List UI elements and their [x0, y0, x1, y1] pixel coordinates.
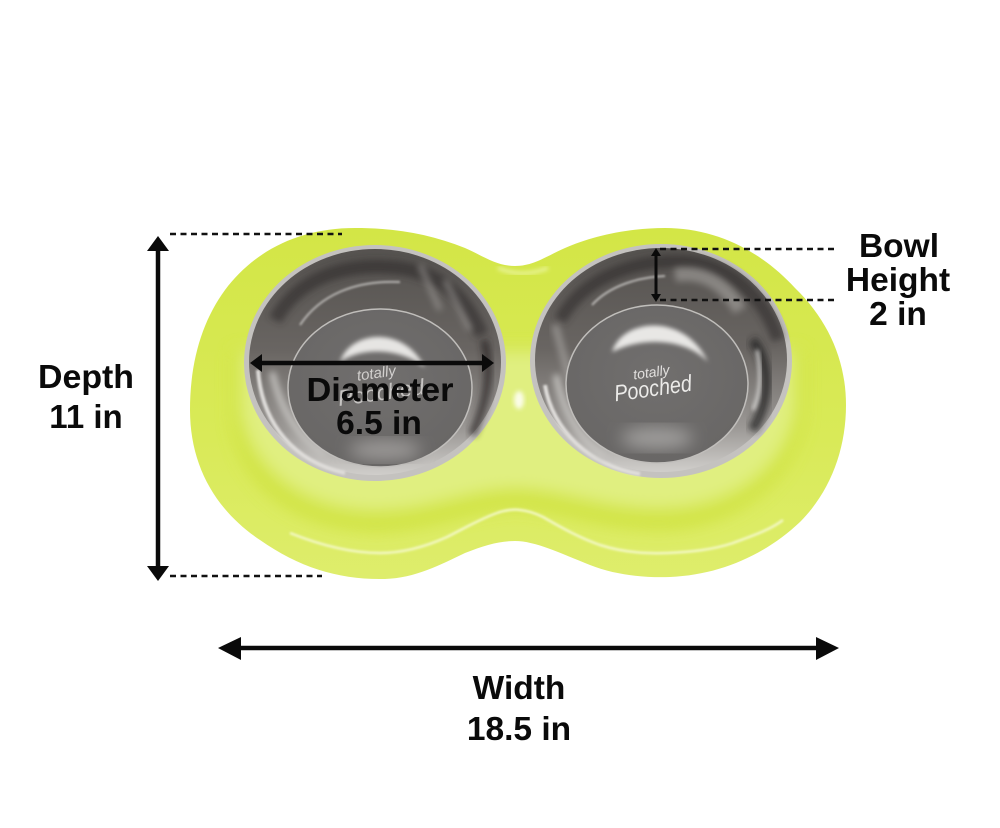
label: width [467, 670, 571, 748]
bowl logo: left: totally [356, 362, 398, 385]
label: bowl height [846, 228, 950, 333]
arrow: width [218, 637, 839, 660]
label: depth: Depth [38, 358, 134, 395]
bowl logo: right: totally [632, 361, 672, 383]
product photo: double bowl feeder [190, 228, 846, 579]
arrow: bowl height [651, 248, 661, 302]
depth guide lines [170, 234, 342, 576]
label: diameter: Diameter [306, 371, 454, 408]
label: bowl height: Bowl [859, 228, 939, 265]
label: diameter [306, 371, 454, 442]
green tray [190, 228, 846, 579]
bowl logo: left: Pooched [336, 374, 426, 411]
left steel bowl [244, 245, 506, 481]
label: width: 18.5 in [467, 711, 571, 748]
label: diameter: 6.5 in [336, 405, 422, 442]
arrow: depth [147, 236, 169, 581]
arrow: diameter [250, 354, 494, 372]
right steel bowl [530, 244, 792, 478]
label: depth: 11 in [49, 398, 123, 435]
label: bowl height: Height [846, 262, 950, 299]
label: depth [38, 358, 134, 435]
bowl height guide lines [660, 249, 834, 300]
bowl logo: right: Pooched [612, 370, 694, 406]
label: bowl height: 2 in [869, 296, 927, 333]
label: width: Width [473, 670, 565, 707]
